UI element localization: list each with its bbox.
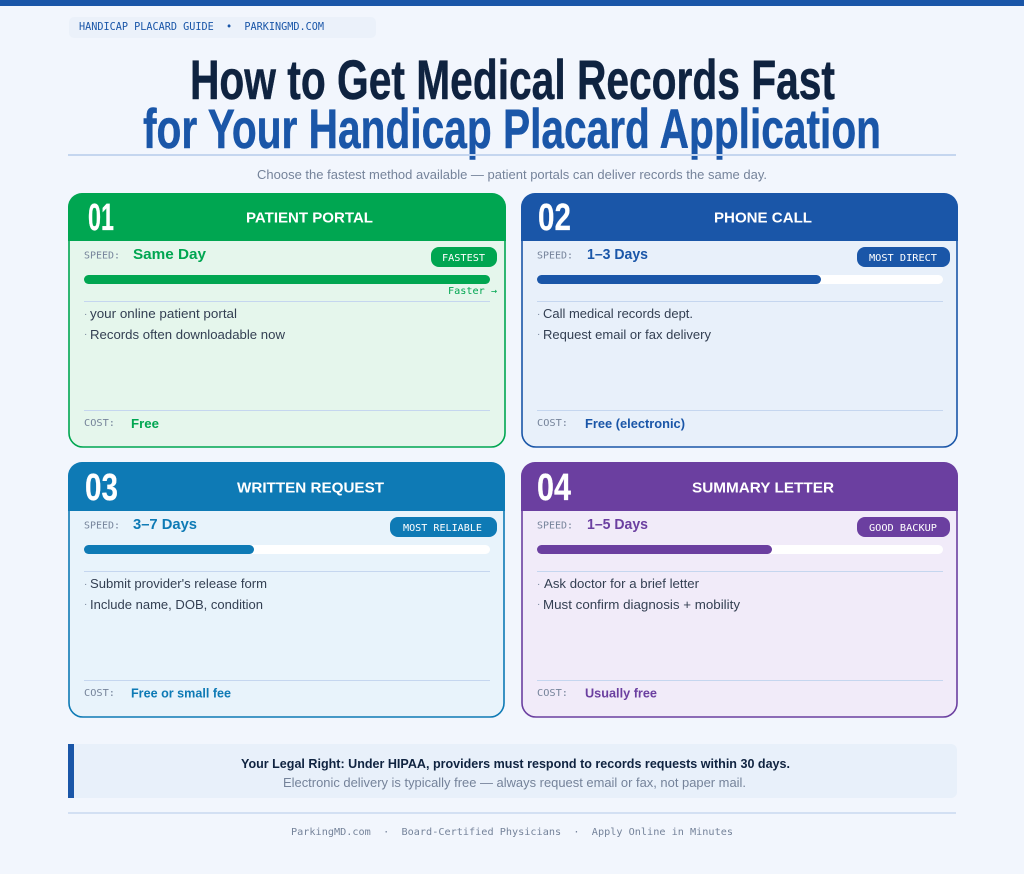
badge: FASTEST (442, 253, 485, 264)
bullets: Submit provider's release form (90, 576, 267, 591)
cost: COST: (537, 688, 568, 699)
speed: 1–3 Days (587, 246, 648, 263)
speed (537, 246, 648, 263)
badge: GOOD BACKUP (869, 523, 937, 534)
speed bar (84, 275, 490, 284)
bullets (84, 576, 267, 612)
speed: SPEED: (84, 250, 120, 262)
bullets: · (537, 309, 540, 320)
bullets (84, 306, 286, 342)
bullets: · (84, 579, 87, 590)
number 01: 01 (88, 197, 114, 239)
guide tag: HANDICAP PLACARD GUIDE • PARKINGMD.COM (79, 21, 324, 33)
panel: patient portal (68, 193, 506, 447)
speed: Same Day (133, 246, 207, 263)
badge (857, 517, 950, 537)
speed (84, 246, 207, 263)
speed (84, 516, 197, 533)
bullets: · (537, 329, 540, 340)
speed bar (84, 545, 490, 554)
cost: COST: (84, 418, 115, 429)
bullets: Request email or fax delivery (543, 327, 711, 342)
callout: legal right (68, 744, 957, 798)
cost: Free or small fee (131, 686, 231, 700)
number 03: 03 (85, 467, 118, 509)
top bar (0, 0, 1024, 6)
footer: ParkingMD.com · Board-Certified Physicians · Apply Online in Minutes (291, 827, 733, 838)
bullets: Include name, DOB, condition (90, 597, 263, 612)
cost: Usually free (585, 686, 657, 700)
cost (84, 686, 231, 700)
bullets: your online patient portal (90, 306, 237, 321)
cost (84, 416, 159, 431)
panel: phone call (521, 193, 958, 447)
bullets: · (84, 329, 87, 340)
number 04: 04 (537, 467, 571, 509)
badge (431, 247, 497, 267)
subtitle: Choose the fastest method available — patient portals can deliver records the same day. (257, 167, 767, 182)
faster label: Faster → (448, 286, 497, 297)
bullets (537, 576, 741, 612)
bullets: Call medical records dept. (543, 306, 693, 321)
speed: SPEED: (537, 520, 573, 532)
bullets: · (537, 579, 540, 590)
speed: 1–5 Days (587, 516, 648, 533)
title (143, 48, 881, 160)
heading: PHONE CALL (714, 210, 812, 226)
speed: SPEED: (537, 250, 573, 262)
bullets: Records often downloadable now (90, 327, 286, 342)
badge (857, 247, 950, 267)
callout: legal right: Your Legal Right: Under HIPAA, providers must respond to records requests within 30 days. (241, 756, 790, 771)
speed: SPEED: (84, 520, 120, 532)
callout: legal right: Electronic delivery is typically free — always request email or fax, not paper mail. (283, 775, 746, 790)
cost: COST: (84, 688, 115, 699)
panel: summary letter (521, 462, 958, 717)
badge (390, 517, 497, 537)
cost (537, 416, 685, 431)
guide tag (69, 17, 376, 38)
cost: COST: (537, 418, 568, 429)
badge: MOST RELIABLE (403, 523, 482, 534)
badge: MOST DIRECT (869, 253, 937, 264)
bullets: · (84, 599, 87, 610)
bullets: · (84, 309, 87, 320)
bullets: Must confirm diagnosis + mobility (543, 597, 741, 612)
heading: PATIENT PORTAL (246, 210, 373, 226)
speed: 3–7 Days (133, 516, 197, 533)
bullets: · (537, 599, 540, 610)
panel: written request (68, 462, 505, 717)
cost: Free (electronic) (585, 416, 685, 431)
cost: Free (131, 416, 159, 431)
cost (537, 686, 657, 700)
heading: WRITTEN REQUEST (237, 480, 384, 496)
bullets (537, 306, 711, 342)
speed (537, 516, 648, 533)
heading: SUMMARY LETTER (692, 480, 834, 496)
number 02: 02 (538, 197, 571, 239)
bullets: Ask doctor for a brief letter (544, 576, 700, 591)
speed bar (537, 275, 943, 284)
speed bar (537, 545, 943, 554)
